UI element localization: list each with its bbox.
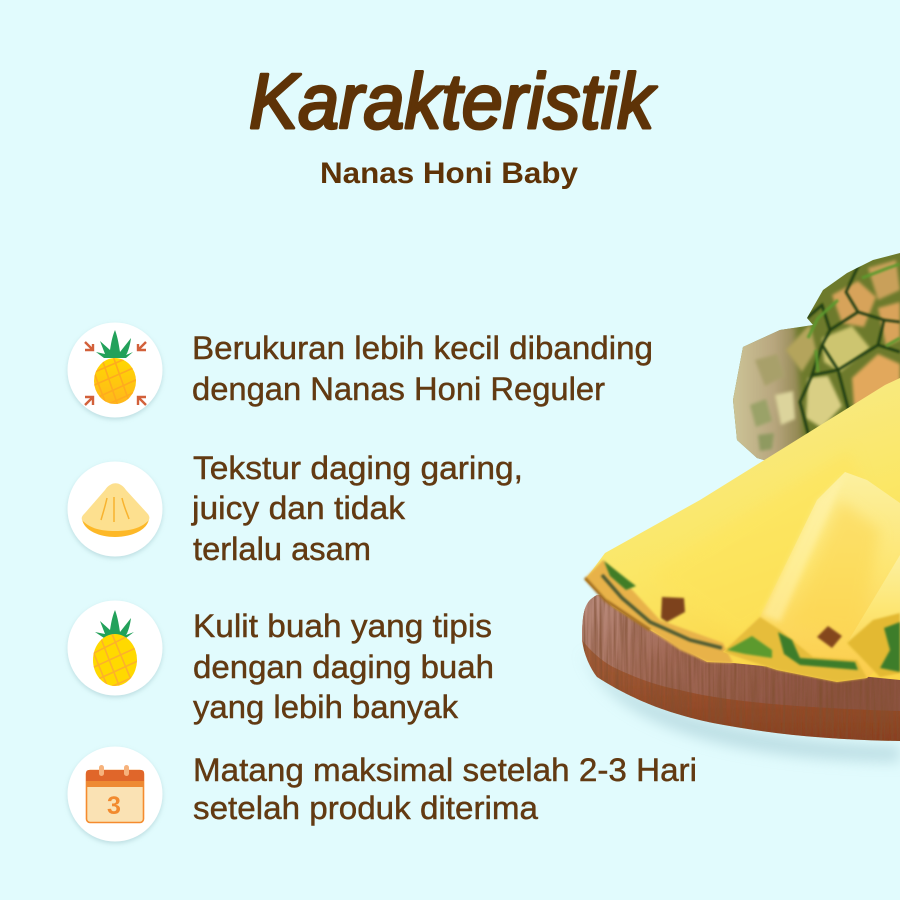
item 1 text: dengan Nanas Honi Reguler	[192, 371, 605, 407]
middle slice rind	[723, 617, 867, 682]
item 2: icon pineapple slice	[68, 462, 162, 556]
item 3: icon pineapple	[68, 600, 162, 696]
arrows	[85, 342, 146, 405]
rind spot	[661, 597, 685, 622]
item 4: icon calendar	[68, 746, 162, 842]
item 3 text: yang lebih banyak	[193, 689, 459, 725]
pineapple body	[94, 358, 136, 404]
subtitle: Nanas Honi Baby	[320, 157, 578, 190]
large slice	[585, 378, 900, 680]
board shadow	[582, 650, 900, 762]
photo: pineapple on wooden board	[582, 245, 900, 762]
pineapple crown	[96, 330, 133, 358]
item 4 text: setelah produk diterima	[193, 790, 538, 826]
item 3 text: Kulit buah yang tipis	[193, 608, 492, 644]
item 2 text: Tekstur daging garing,	[193, 450, 523, 486]
item 4 text: Matang maksimal setelah 2-3 Hari	[193, 752, 697, 788]
item 3 text	[193, 608, 494, 725]
item 2 text: juicy dan tidak	[191, 490, 406, 526]
title: Karakteristik	[249, 57, 658, 145]
item 3 text: dengan daging buah	[193, 649, 494, 685]
item 4 text	[193, 752, 697, 826]
right slice	[847, 555, 900, 677]
item 1: icon small pineapple	[68, 322, 162, 418]
middle slice	[723, 472, 900, 682]
item 2 text: terlalu asam	[193, 531, 371, 567]
item 2 text	[191, 450, 523, 567]
item 4: icon calendar: 3	[107, 792, 121, 820]
item 1 text: Berukuran lebih kecil dibanding	[192, 330, 653, 366]
whole pineapple	[733, 253, 900, 460]
large slice rind	[585, 560, 733, 663]
board	[582, 595, 900, 741]
item 1 text	[192, 330, 653, 407]
